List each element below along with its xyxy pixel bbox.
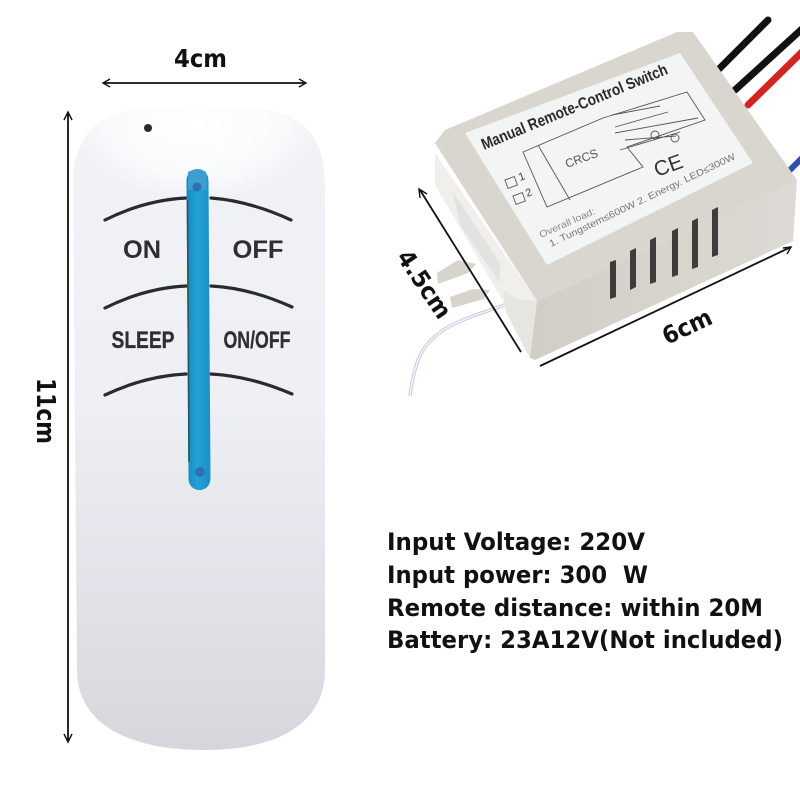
width arrow: 6cm: 6cm: [658, 303, 717, 350]
button label: ON: ON: [123, 236, 161, 264]
front face: [530, 180, 797, 360]
specifications text: [387, 528, 783, 654]
vent slots: [610, 207, 718, 299]
blue light bar: [186, 169, 210, 490]
label sticker: [465, 53, 753, 265]
button label: SLEEP: SLEEP: [112, 327, 174, 354]
button label: ON/OFF: ON/OFF: [224, 327, 290, 354]
height arrow: 11cm: [30, 112, 72, 742]
spec: input voltage: Input Voltage: 220V: [387, 528, 645, 556]
side plate: [453, 192, 500, 283]
sticker text: CRCS: CRCS: [563, 146, 600, 171]
sticker text: overall load: Overall load:: [538, 206, 597, 241]
top face: [435, 32, 797, 301]
wires: [718, 20, 800, 172]
remote control: [73, 119, 325, 750]
top highlight: [109, 108, 284, 178]
receiver module: [410, 20, 800, 396]
width arrow: 4cm: 4cm: [174, 44, 227, 73]
button label: OFF: OFF: [232, 236, 284, 264]
side corner: [503, 290, 537, 358]
depth arrow: 4.5cm: [391, 189, 521, 352]
button divider lines: [105, 198, 292, 395]
spec: input power: Input power: 300 W: [387, 561, 648, 589]
mounting tabs: [437, 260, 476, 284]
sticker text: 2: 2: [524, 186, 534, 200]
wiring diagram: [505, 92, 705, 207]
sticker text: 1: 1: [517, 170, 527, 184]
side face: [435, 153, 537, 313]
CE mark: CE: [651, 150, 686, 182]
depth arrow: 4.5cm: 4.5cm: [391, 245, 457, 324]
sticker text: load ratings: 1. Tungstem≤600W 2. Energy. LED≤300W: [548, 152, 737, 250]
spec: battery: Battery: 23A12V(Not included): [387, 626, 783, 654]
antenna wire: [410, 304, 507, 396]
sticker title: Manual Remote-Control Switch: [479, 61, 670, 154]
remote body: [73, 108, 325, 750]
height arrow: 11cm: 11cm: [30, 378, 60, 444]
width arrow: 6cm: [540, 247, 791, 366]
spec: remote distance: Remote distance: within 20M: [387, 594, 763, 622]
width arrow: 4cm: [103, 44, 306, 87]
indicator dot: [144, 124, 152, 132]
